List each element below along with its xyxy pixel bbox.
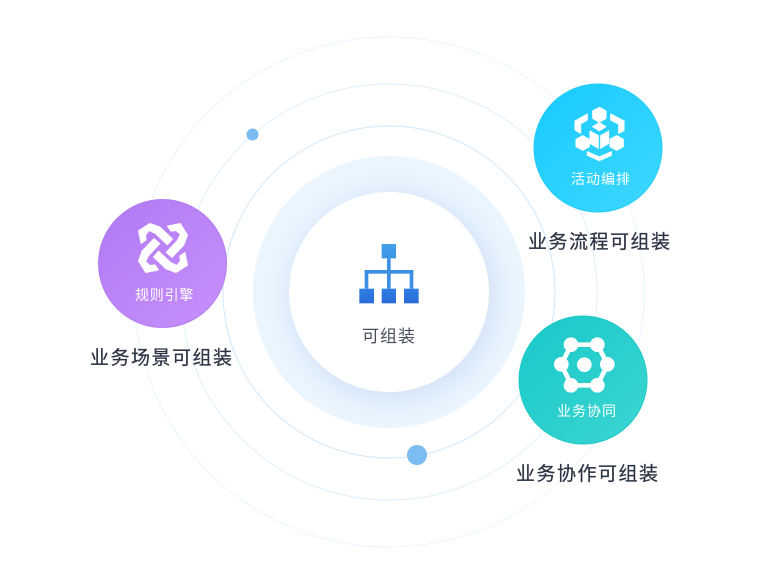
node: business collaboration — [519, 316, 647, 444]
heading: business scenario: 业务场景可组装 — [90, 347, 234, 369]
node: activity orchestration — [534, 84, 662, 212]
heading: business process: 业务流程可组装 — [528, 231, 672, 253]
icon: business collaboration — [554, 337, 615, 393]
icon: rule engine — [138, 223, 188, 273]
label: activity orchestration: 活动编排 — [571, 171, 631, 187]
label: rule engine: 规则引擎 — [135, 287, 194, 303]
node: rule engine — [98, 200, 226, 328]
center label: 可组装 — [362, 327, 416, 346]
orbit rings — [134, 37, 644, 547]
orbit dot large — [407, 445, 427, 465]
icon: activity orchestration — [575, 107, 624, 161]
heading: business collaboration: 业务协作可组装 — [516, 463, 660, 485]
central donut — [253, 156, 525, 428]
icon: hierarchy — [359, 244, 419, 303]
orbit dot small — [246, 128, 258, 140]
label: business collaboration: 业务协同 — [557, 403, 617, 419]
